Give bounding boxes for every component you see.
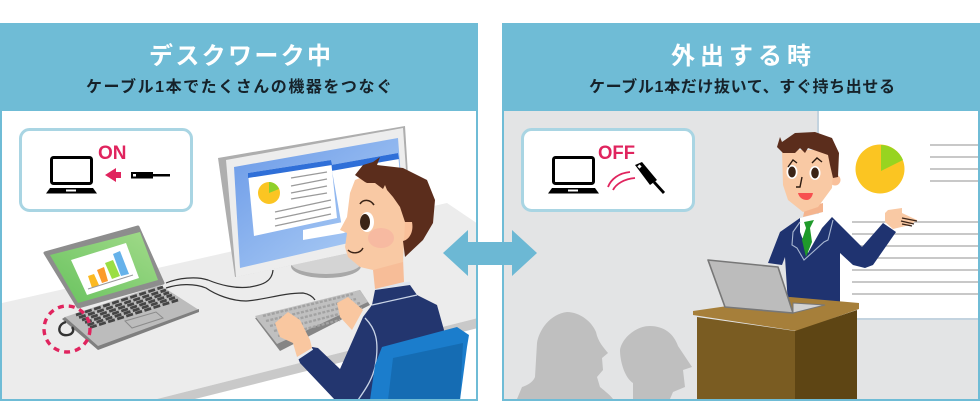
callout: dashed circle around cable port [44, 306, 90, 352]
panel: going out [502, 23, 980, 400]
suit [768, 217, 896, 305]
pie chart [856, 144, 904, 194]
man at desk [275, 157, 444, 400]
face [340, 172, 405, 270]
hair [777, 132, 839, 178]
hands [275, 297, 363, 357]
chair [370, 327, 469, 400]
label: ON: ON [98, 143, 126, 164]
desk [2, 203, 478, 399]
heading: desk work: デスクワーク中 [149, 42, 331, 70]
icon: unplug motion arcs [608, 172, 635, 190]
tie [802, 220, 814, 257]
bar chart on screen [88, 251, 133, 289]
subheading: desk work: ケーブル1本でたくさんの機器をつなぐ [86, 77, 392, 96]
face details [786, 158, 822, 200]
shirt [800, 212, 832, 253]
neck [803, 203, 823, 217]
illustration: office desk scene [2, 126, 478, 400]
panel header: going out [502, 23, 980, 111]
suit [298, 285, 444, 400]
status box: cable connected [20, 130, 192, 210]
keyboard [255, 290, 370, 351]
arrow: two-way between panels [443, 230, 537, 276]
eye [360, 212, 374, 232]
subheading: going out: ケーブル1本だけ抜いて、すぐ持ち出せる [589, 77, 895, 96]
laptop [45, 227, 199, 350]
status box: cable removed [522, 130, 694, 210]
icon: cable plug [131, 172, 170, 178]
window with pie chart [248, 160, 337, 236]
neck [373, 258, 404, 289]
panel: desk work [0, 23, 478, 400]
lapels [792, 220, 833, 260]
icon: laptop [46, 158, 97, 194]
ear [404, 221, 412, 241]
heading: going out: 外出する時 [671, 43, 811, 70]
face [782, 150, 834, 212]
podium [693, 297, 859, 399]
whiteboard [817, 111, 980, 320]
hand [885, 208, 917, 229]
illustration: presentation scene [517, 111, 980, 399]
presenter [768, 132, 917, 305]
ear [832, 176, 840, 186]
icon: laptop [548, 158, 599, 194]
monitor [218, 126, 412, 278]
cables [166, 270, 315, 301]
arrow: plug in [105, 168, 121, 182]
icon: cable plug [635, 162, 664, 193]
label: OFF: OFF [598, 143, 635, 164]
audience silhouettes [517, 312, 692, 399]
panel header: desk work [0, 23, 478, 111]
hair [355, 157, 435, 257]
presenter laptop [708, 260, 825, 313]
